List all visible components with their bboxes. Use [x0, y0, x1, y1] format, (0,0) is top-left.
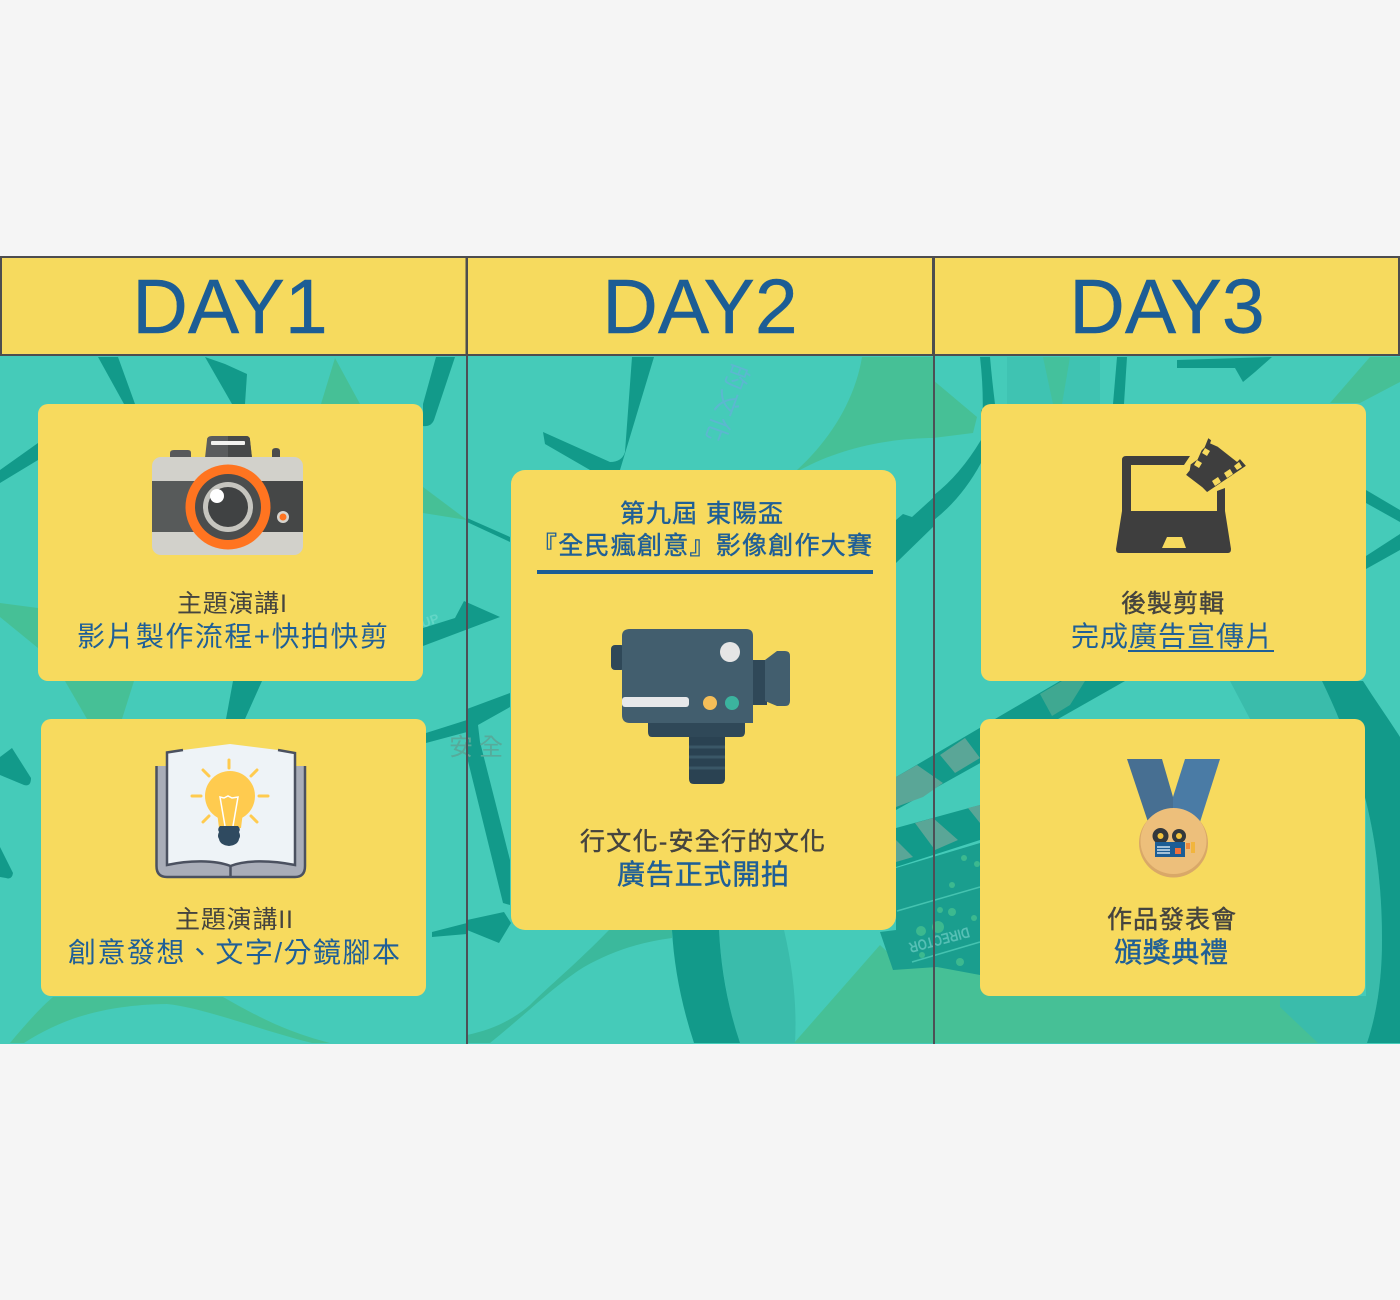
text: filming caption: 行文化-安全行的文化	[580, 828, 825, 856]
text: keynote I: 主題演講I	[177, 590, 287, 618]
text: keynote II	[68, 906, 400, 968]
teal patterned backdrop	[0, 356, 1400, 1044]
panel: DAY3 post production	[981, 404, 1366, 681]
panel: DAY1 keynote II	[41, 719, 426, 996]
header: DAY1	[1, 257, 466, 355]
icon: medal	[1127, 759, 1220, 878]
text: award caption: 頒獎典禮	[1114, 937, 1228, 968]
header: DAY2	[467, 257, 933, 355]
text: post production caption: 完成廣告宣傳片	[1071, 621, 1273, 652]
text: post production caption	[1071, 590, 1274, 652]
panel: DAY1 keynote I	[38, 404, 423, 681]
faint rotated background text: 的文化	[699, 360, 754, 448]
icon: video camera	[611, 629, 790, 784]
header: DAY2: DAY2	[602, 264, 798, 350]
faint rotated background text: 安全	[449, 734, 509, 761]
heading: contest title: 第九屆 東陽盃	[620, 500, 783, 528]
text: keynote I	[77, 590, 388, 652]
icon: camera	[152, 436, 303, 555]
column dividers	[467, 356, 934, 1044]
heading: contest title: 『全民瘋創意』影像創作大賽	[532, 532, 872, 560]
text: award caption: 作品發表會	[1107, 906, 1236, 934]
icon: laptop with film strip	[1116, 437, 1247, 553]
faint rotated background text: DIRECTOR	[907, 923, 971, 956]
panel: DAY3 award ceremony	[980, 719, 1365, 996]
text: filming caption: 廣告正式開拍	[617, 859, 789, 890]
text: keynote II: 主題演講II	[175, 906, 293, 934]
icon: book with light bulb	[156, 744, 305, 877]
text: award caption	[1107, 906, 1236, 968]
faint rotated background text: UP	[419, 610, 441, 631]
text: keynote I: 影片製作流程+快拍快剪	[77, 621, 388, 652]
header: DAY3	[934, 257, 1399, 355]
text: filming caption	[580, 828, 825, 890]
header: DAY3: DAY3	[1069, 264, 1265, 350]
heading: contest title	[532, 500, 873, 574]
faint rotated background text	[419, 360, 971, 956]
text: post production caption: 後製剪輯	[1121, 590, 1224, 618]
header: DAY1: DAY1	[132, 264, 328, 350]
text: keynote II: 創意發想、文字/分鏡腳本	[68, 937, 400, 968]
panel: DAY2 contest shoot	[511, 470, 896, 930]
